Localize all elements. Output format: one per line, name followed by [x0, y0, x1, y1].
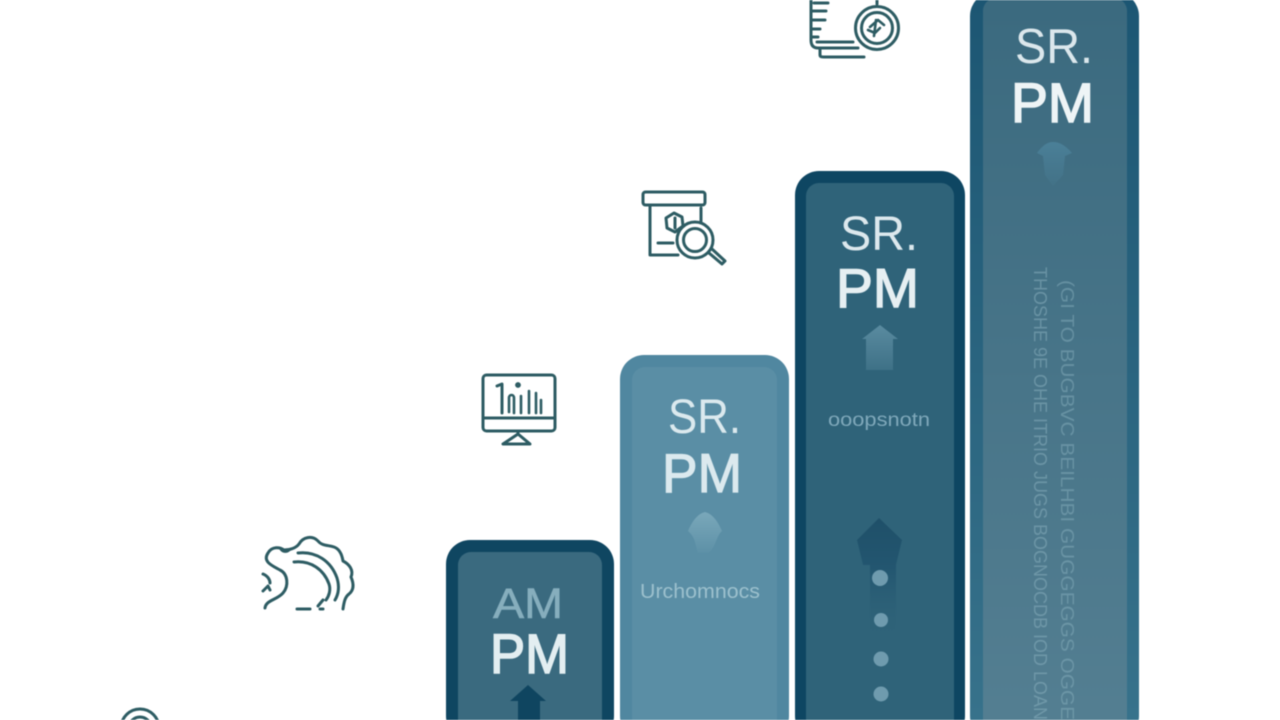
bar 3 label: SR.: [840, 208, 918, 261]
bar 3 caption: ooopsnotn: [828, 410, 930, 431]
bar 4 vertical text column 1: THOSHE 9E OHE ITRIO JUGS BOGNOCDB IOD LOAN: [1030, 267, 1050, 720]
icon: monitor with chart: [483, 375, 555, 444]
bar 4: SR PM: [970, 0, 1139, 720]
bar 4 label: SR.: [1015, 20, 1093, 74]
bar 2 label: PM: [662, 442, 742, 504]
bar 4 arrow: [1037, 142, 1072, 186]
bar 2 label: [662, 391, 742, 504]
bar 3 label: PM: [836, 257, 919, 319]
bar 3: SR PM: [795, 171, 965, 720]
bar 3 pentagon marker: [857, 518, 902, 640]
bar 1 label: [490, 580, 569, 685]
bar 2 caption: Urchomnocs: [640, 581, 760, 603]
bar 3 progress dots: [872, 570, 888, 702]
bar 2 arrow: [688, 512, 722, 553]
bar 2 label: SR.: [668, 391, 741, 444]
bar 3 arrow: [862, 325, 898, 370]
icon: coil and coin: [811, 0, 898, 57]
bar 1: AM PM: [446, 540, 614, 720]
icon: cloud gear with arcs: [263, 537, 353, 609]
bar 1 label: PM: [490, 622, 569, 685]
icon: concentric target, cropped: [121, 709, 159, 720]
icon: document with magnifier: [643, 192, 725, 264]
bar 1 label: AM: [493, 580, 563, 628]
bar 4 label: [1011, 20, 1094, 134]
bar 3 label: [836, 208, 919, 319]
bar 2: SR PM: [620, 355, 789, 720]
bar 4 label: PM: [1011, 71, 1094, 134]
bar 4 vertical text column 2: (GI TO BUGBVC BEILHBI GUGGEGGS OGGE: [1057, 280, 1077, 720]
bar 1 arrow: [510, 685, 546, 720]
